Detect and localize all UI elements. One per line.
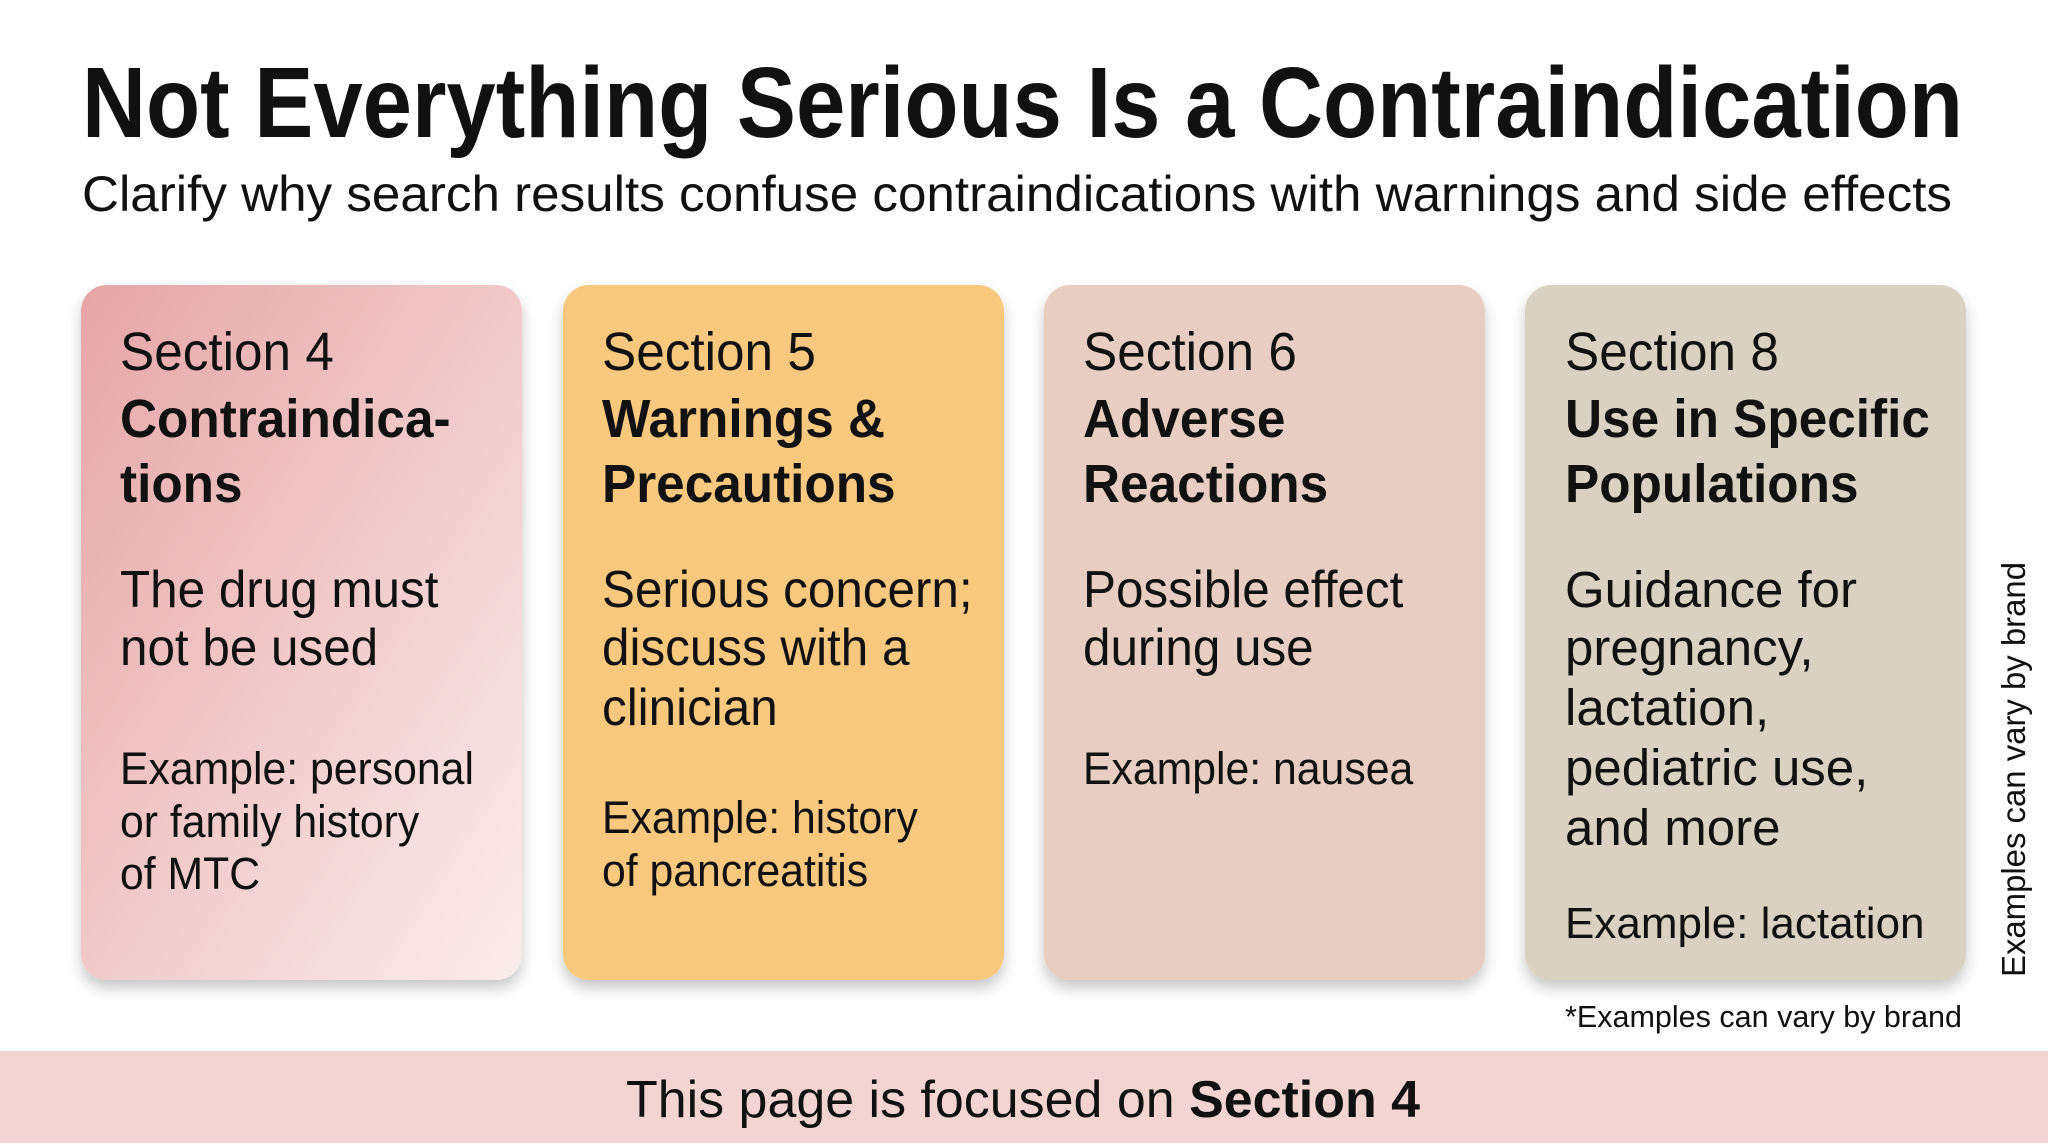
panel: section 8: Guidance for xyxy=(1565,561,1857,618)
panel: section 8: pediatric use, xyxy=(1565,739,1868,796)
panel: section 5: of pancreatitis xyxy=(602,846,868,896)
panel: section 6: Section 6 xyxy=(1083,322,1297,382)
panel: section 8: and more xyxy=(1565,799,1780,856)
panel: section 4 xyxy=(81,285,522,980)
panel: section 6: Example: nausea xyxy=(1083,744,1414,794)
panel: section 6 xyxy=(1044,285,1485,980)
panel: section 5: discuss with a xyxy=(602,618,910,676)
panel: section 4: Section 4 xyxy=(120,322,334,382)
bottom banner: This page is focused on Section 4 xyxy=(626,1071,1420,1129)
panel: section 4: Contraindica- xyxy=(120,389,451,449)
panel: section 8: Section 8 xyxy=(1565,322,1779,382)
panel: section 4: tions xyxy=(120,454,243,514)
footnote: *Examples can vary by brand xyxy=(1565,999,1962,1034)
panel: section 4: of MTC xyxy=(120,849,260,899)
panel: section 8 xyxy=(1525,285,1966,980)
panel: section 5: Warnings & xyxy=(602,389,885,449)
panel: section 4: Example: personal xyxy=(120,744,474,794)
panel: section 5 xyxy=(563,285,1004,980)
panel: section 8: Use in Specific xyxy=(1565,389,1930,449)
panel: section 8: Populations xyxy=(1565,454,1858,514)
subtitle: Clarify why search results confuse contraindications with warnings and side effects xyxy=(82,166,1952,222)
panel: section 4: not be used xyxy=(120,618,378,676)
panel: section 4: or family history xyxy=(120,797,419,847)
panel: section 6: during use xyxy=(1083,618,1314,676)
vertical note: Examples can vary by brand xyxy=(1995,562,2032,977)
bottom banner xyxy=(0,1051,2048,1143)
panel: section 5: clinician xyxy=(602,678,778,736)
panel: section 5: Section 5 xyxy=(602,322,816,382)
panel: section 6: Adverse xyxy=(1083,389,1285,449)
panel: section 5: Serious concern; xyxy=(602,560,973,618)
panel: section 5: Precautions xyxy=(602,454,896,514)
panel: section 8: Example: lactation xyxy=(1565,899,1925,948)
panel: section 8: pregnancy, xyxy=(1565,619,1814,676)
panel: section 4: The drug must xyxy=(120,560,438,618)
panel: section 6: Possible effect xyxy=(1083,560,1403,618)
panel: section 8: lactation, xyxy=(1565,679,1769,736)
panel: section 6: Reactions xyxy=(1083,454,1328,514)
panel: section 5: Example: history xyxy=(602,793,918,843)
